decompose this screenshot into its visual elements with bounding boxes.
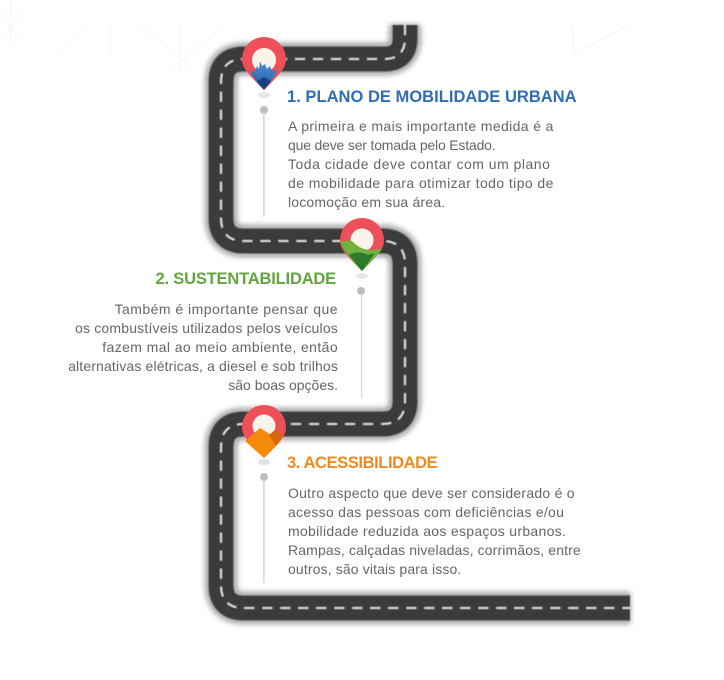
text block: step 1: A primeira e mais importante medida é a	[288, 118, 554, 134]
heading: acessibilidade: 3. ACESSIBILIDADE	[287, 454, 437, 472]
text block: step 3	[288, 485, 581, 577]
text block: step 1: Toda cidade deve contar com um plano	[288, 156, 550, 172]
text block: step 3: Outro aspecto que deve ser considerado é o	[288, 485, 575, 501]
heading: plano de mobilidade urbana: 1. PLANO DE MOBILIDADE URBANA	[287, 88, 577, 106]
text block: step 3: mobilidade reduzida aos espaços urbanos.	[288, 523, 566, 539]
text block: step 2	[68, 301, 338, 393]
pin 1: blue city	[242, 37, 286, 90]
pin 2: green hills	[340, 218, 384, 271]
timeline 2	[356, 273, 368, 398]
text block: step 2: Também é importante pensar que	[115, 301, 338, 317]
text block: step 1: de mobilidade para otimizar todo tipo de	[288, 175, 554, 191]
road	[221, 25, 630, 608]
timeline 3	[258, 459, 270, 583]
text block: step 2: são boas opções.	[228, 377, 338, 393]
text block: step 1: locomoção em sua área.	[288, 194, 445, 210]
text block: step 1: que deve ser tomada pelo Estado.	[288, 137, 496, 153]
pin 3: orange diamond	[242, 405, 286, 458]
text block: step 1	[288, 118, 554, 210]
heading: sustentabilidade: 2. SUSTENTABILIDADE	[155, 270, 336, 288]
text block: step 3: Rampas, calçadas niveladas, corrimãos, entre	[288, 542, 581, 558]
text block: step 3: acesso das pessoas com deficiências e/ou	[288, 504, 564, 520]
text block: step 2: os combustíveis utilizados pelos veículos	[75, 320, 338, 336]
faint background marks	[0, 0, 628, 70]
text block: step 2: alternativas elétricas, a diesel e sob trilhos	[68, 358, 338, 374]
text block: step 3: outros, são vitais para isso.	[288, 561, 461, 577]
text block: step 2: fazem mal ao meio ambiente, então	[102, 339, 338, 355]
timeline 1	[258, 92, 270, 217]
